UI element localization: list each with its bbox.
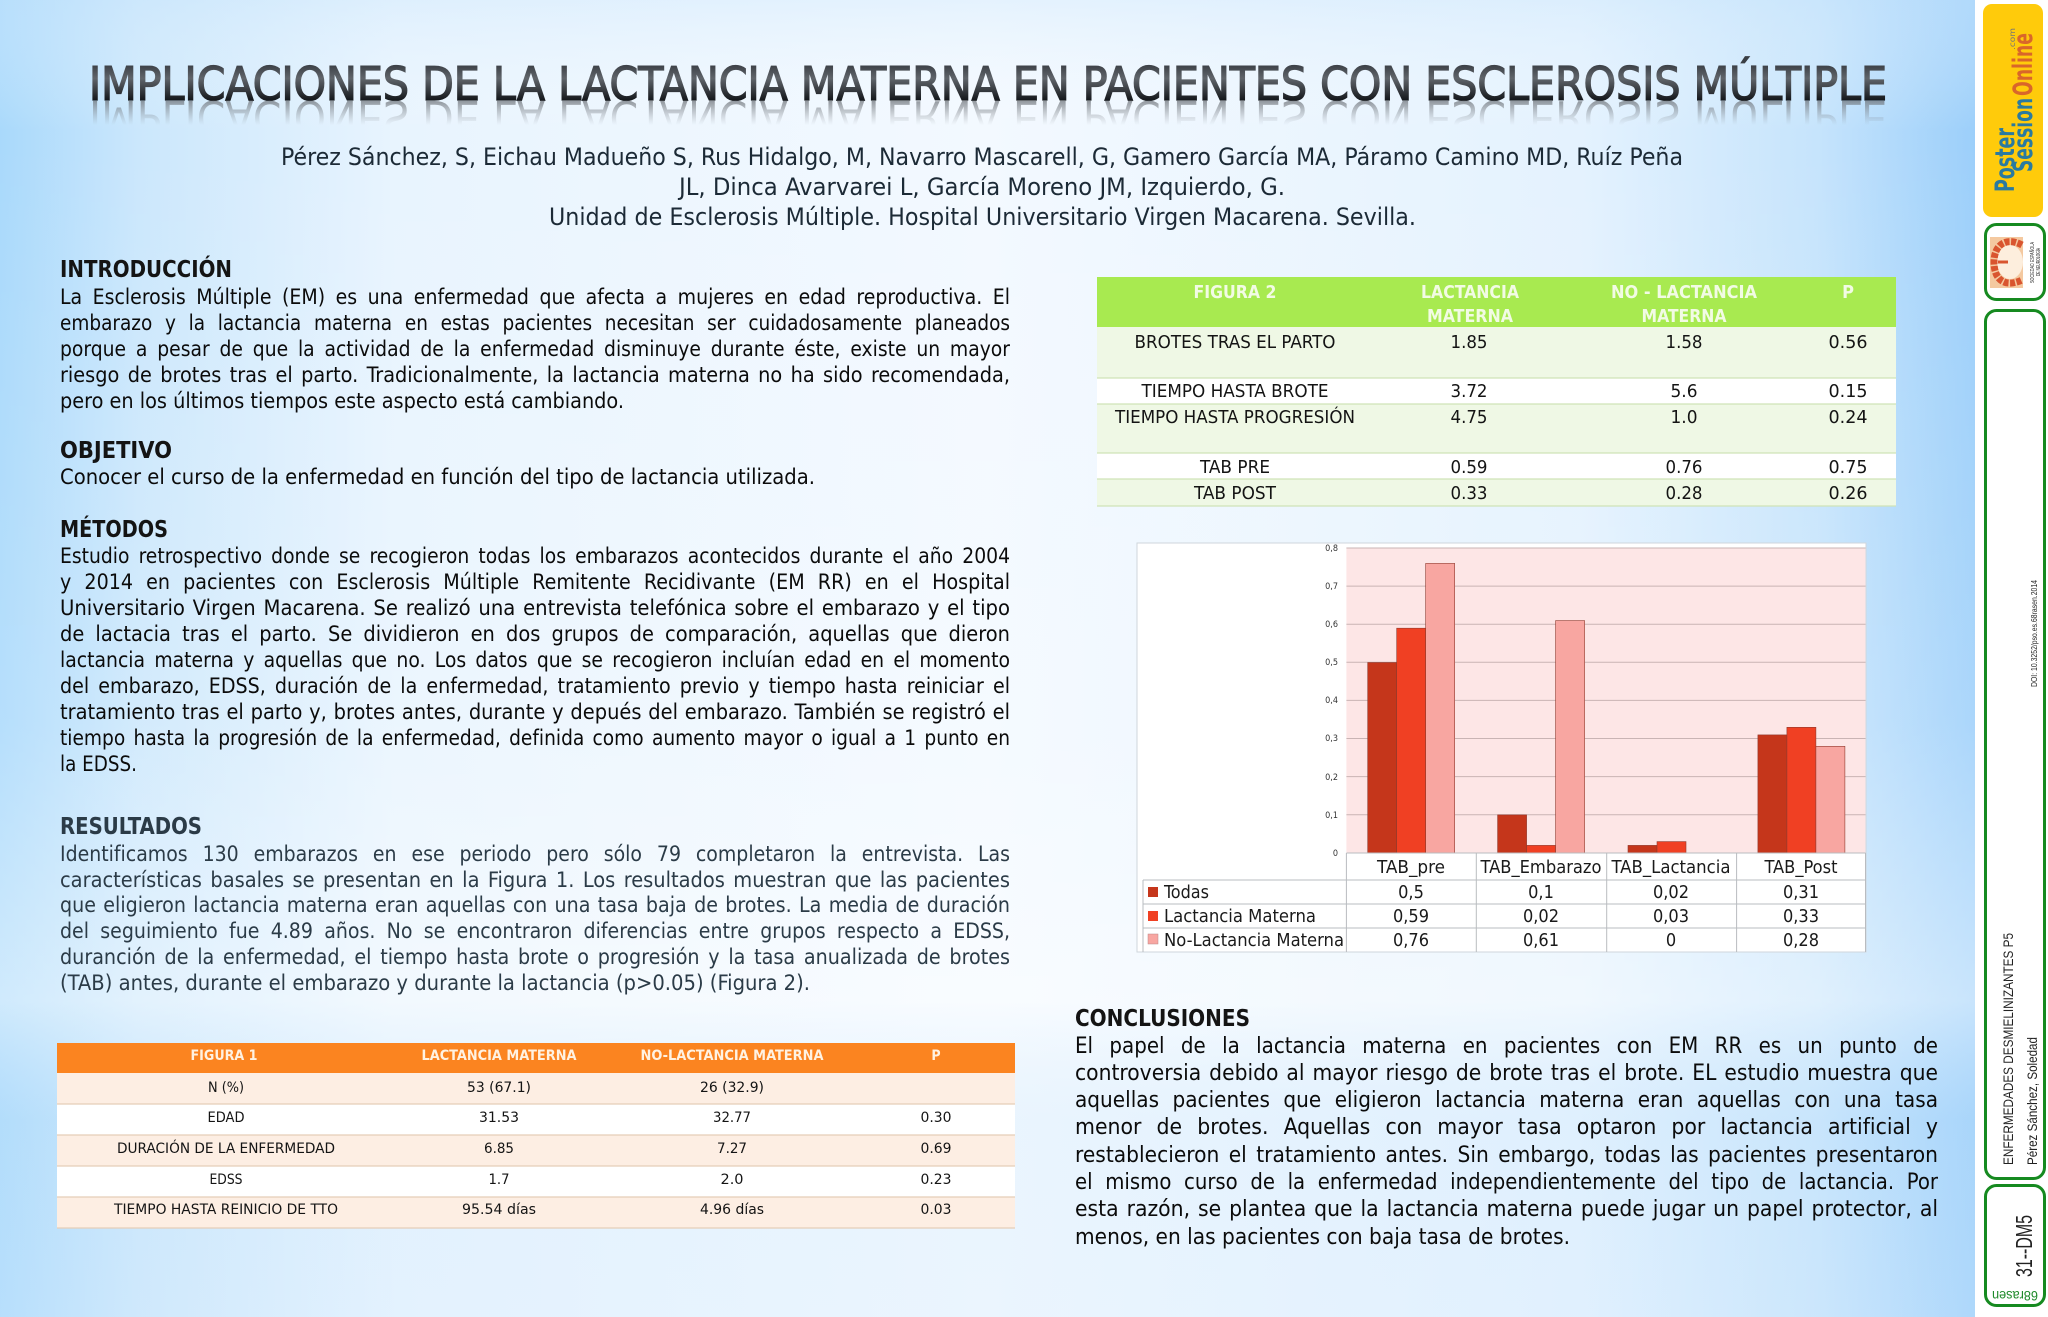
chart axis labels: 0,6 bbox=[1325, 620, 1338, 630]
table: figura 2: 5.6 bbox=[1670, 381, 1698, 402]
chart data table: 0 bbox=[1666, 930, 1676, 951]
table: figura 1: NO-LACTANCIA MATERNA bbox=[640, 1048, 824, 1064]
table: figura 2: 4.75 bbox=[1450, 407, 1488, 428]
chart data table: No-Lactancia Materna bbox=[1164, 930, 1344, 951]
chart data table: 0,03 bbox=[1653, 906, 1689, 927]
table: figura 1: 26 (32.9) bbox=[700, 1080, 764, 1096]
authors and affiliation bbox=[281, 143, 1683, 231]
heading: conclusiones: CONCLUSIONES bbox=[1075, 1006, 1250, 1032]
logo: sociedad de neurología bbox=[1986, 224, 2044, 300]
table: figura 1: TIEMPO HASTA REINICIO DE TTO bbox=[113, 1202, 338, 1218]
chart data table: TAB_pre bbox=[1376, 857, 1445, 878]
chart data table: Todas bbox=[1163, 882, 1209, 903]
table: figura 2: FIGURA 2 bbox=[1194, 282, 1276, 303]
logo: sociedad de neurología: SOCIEDAD ESPAÑOLA bbox=[2029, 241, 2036, 283]
chart axis labels: 0,2 bbox=[1325, 773, 1338, 783]
logo: Poster Session Online: Poster bbox=[1990, 128, 2021, 192]
chart data table: 0,33 bbox=[1783, 906, 1819, 927]
table: figura 2: MATERNA bbox=[1642, 306, 1727, 327]
table: figura 2: 1.58 bbox=[1666, 332, 1702, 353]
table: figura 2: 3.72 bbox=[1450, 381, 1488, 402]
table: figura 2: 1.85 bbox=[1450, 332, 1488, 353]
table: figura 2: MATERNA bbox=[1427, 306, 1513, 327]
table: figura 1: 2.0 bbox=[720, 1172, 744, 1188]
heading: métodos: MÉTODOS bbox=[60, 515, 168, 543]
poster code box: 31--DM5 bbox=[2011, 1215, 2037, 1277]
table: figura 1: 1.7 bbox=[488, 1172, 510, 1188]
table: figura 1: 53 (67.1) bbox=[467, 1080, 531, 1096]
table: figura 1: EDAD bbox=[208, 1110, 244, 1126]
table: figura 2 bbox=[1097, 277, 1896, 506]
text block: métodos: tiempo hasta la progresión de la enfermedad, definida como aumento mayor o igual a 1 punto en bbox=[60, 726, 1010, 750]
table: figura 1: P bbox=[931, 1048, 941, 1064]
logo: Poster Session Online bbox=[1983, 4, 2043, 217]
chart data table: 0,02 bbox=[1523, 906, 1559, 927]
table: figura 1: 4.96 días bbox=[700, 1202, 764, 1218]
table: figura 2: LACTANCIA bbox=[1421, 282, 1519, 303]
heading: resultados: RESULTADOS bbox=[60, 814, 202, 840]
session info box bbox=[1986, 310, 2044, 1178]
table: figura 2: 0.59 bbox=[1450, 457, 1488, 478]
table: figura 2: TIEMPO HASTA BROTE bbox=[1140, 381, 1328, 402]
text block: introducción bbox=[60, 285, 1010, 413]
table: figura 1: 6.85 bbox=[484, 1141, 514, 1157]
chart axis labels: 0,5 bbox=[1325, 658, 1338, 668]
text block: resultados: del seguimiento fue 4.89 años. No se encontraron diferencias entre grupos respecto a EDSS, bbox=[60, 919, 1010, 943]
authors and affiliation: Unidad de Esclerosis Múltiple. Hospital Universitario Virgen Macarena. Sevilla. bbox=[549, 203, 1416, 231]
text block: métodos bbox=[60, 544, 1010, 776]
chart data table: TAB_Post bbox=[1763, 857, 1838, 878]
text block: resultados: Identificamos 130 embarazos en ese periodo pero sólo 79 completaron la entrevista. Las bbox=[60, 842, 1010, 866]
chart axis labels bbox=[1325, 544, 1338, 859]
session info box: ENFERMEDADES DESMIELINIZANTES P5 bbox=[2000, 933, 2016, 1165]
text block: conclusiones: el mismo curso de la enfermedad independientemente del tipo de lactancia. Por bbox=[1075, 1170, 1939, 1195]
text block: introducción: porque a pesar de que la actividad de la enfermedad disminuye durante éste, existe un mayor bbox=[60, 337, 1010, 361]
text block: introducción: pero en los últimos tiempos este aspecto está cambiando. bbox=[60, 389, 624, 413]
session info box: DOI: 10.3252/pso.es.68rasen.2014 bbox=[2030, 580, 2039, 687]
text block: resultados: (TAB) antes, durante el embarazo y durante la lactancia (p>0.05) (Figura 2). bbox=[60, 971, 810, 995]
chart axis labels: 0,8 bbox=[1325, 544, 1338, 554]
text block: conclusiones: menos, en las pacientes con baja tasa de brotes. bbox=[1075, 1225, 1570, 1250]
table: figura 2: NO - LACTANCIA bbox=[1611, 282, 1757, 303]
sidebar bbox=[1975, 0, 2048, 1317]
chart data table: 0,59 bbox=[1393, 906, 1429, 927]
chart data table: 0,31 bbox=[1783, 882, 1819, 903]
panel: conclusiones bbox=[1075, 1006, 1939, 1250]
table: figura 2: 0.28 bbox=[1666, 483, 1702, 504]
chart data table: 0,28 bbox=[1783, 930, 1819, 951]
table: figura 2: 0.75 bbox=[1828, 457, 1868, 478]
chart axis labels: 0,7 bbox=[1325, 582, 1338, 592]
chart data table: 0,02 bbox=[1653, 882, 1689, 903]
table: figura 2: 0.26 bbox=[1828, 483, 1868, 504]
table: figura 1: 7.27 bbox=[717, 1141, 747, 1157]
table: figura 1: 0.69 bbox=[920, 1141, 952, 1157]
table: figura 2: 0.76 bbox=[1666, 457, 1702, 478]
chart data table: TAB_Lactancia bbox=[1610, 857, 1730, 878]
table: figura 1: EDSS bbox=[210, 1172, 242, 1188]
text block: conclusiones: esta razón, se plantea que la lactancia materna puede jugar un papel protector, al bbox=[1075, 1197, 1938, 1222]
heading: objetivo: OBJETIVO bbox=[60, 438, 172, 464]
heading: introducción: INTRODUCCIÓN bbox=[60, 255, 232, 283]
poster code box bbox=[1986, 1186, 2044, 1306]
chart bars bbox=[1368, 563, 1845, 853]
session info box: Pérez Sánchez, Soledad bbox=[2024, 1037, 2040, 1165]
chart data table: Lactancia Materna bbox=[1164, 906, 1316, 927]
text block: conclusiones bbox=[1075, 1034, 1939, 1250]
text block: métodos: y 2014 en pacientes con Esclerosis Múltiple Remitente Recidivante (EM RR) en el Hospital bbox=[60, 570, 1010, 594]
table: figura 2: BROTES TRAS EL PARTO bbox=[1134, 332, 1336, 353]
table: figura 1: 0.30 bbox=[920, 1110, 952, 1126]
title: IMPLICACIONES DE LA LACTANCIA MATERNA EN PACIENTES CON ESCLEROSIS MÚLTIPLE bbox=[89, 90, 1887, 144]
logo: Poster Session Online: .com bbox=[2008, 28, 2017, 50]
table: figura 1: 32.77 bbox=[713, 1110, 751, 1126]
table: figura 2: 0.24 bbox=[1828, 407, 1868, 428]
text block: resultados: duranción de la enfermedad, el tiempo hasta brote o progresión y la tasa anualizada de brotes bbox=[60, 945, 1010, 969]
text block: conclusiones: restablecieron el tratamiento antes. Sin embargo, todas las pacientes presentaron bbox=[1075, 1143, 1938, 1168]
poster code box: 68rasen bbox=[1992, 1288, 2038, 1304]
table: figura 2: TAB PRE bbox=[1199, 457, 1270, 478]
table: figura 2: 1.0 bbox=[1670, 407, 1698, 428]
text block: métodos: la EDSS. bbox=[60, 752, 137, 776]
title: IMPLICACIONES DE LA LACTANCIA MATERNA EN PACIENTES CON ESCLEROSIS MÚLTIPLE bbox=[89, 57, 1887, 111]
chart axis labels: 0,4 bbox=[1325, 696, 1338, 706]
text block: métodos: del embarazo, EDSS, duración de la enfermedad, tratamiento previo y tiempo hasta reiniciar el bbox=[60, 674, 1010, 698]
table: figura 2: P bbox=[1842, 282, 1854, 303]
text block: objetivo: Conocer el curso de la enfermedad en función del tipo de lactancia utilizada. bbox=[60, 465, 815, 489]
table: figura 1: N (%) bbox=[208, 1080, 244, 1096]
text block: introducción: riesgo de brotes tras el parto. Tradicionalmente, la lactancia materna no ha sido recomendada, bbox=[60, 363, 1010, 387]
table: figura 1: DURACIÓN DE LA ENFERMEDAD bbox=[117, 1139, 335, 1157]
text block: conclusiones: aquellas pacientes que eligieron lactancia materna eran aquellas con una tasa bbox=[1075, 1088, 1938, 1113]
table: figura 1 bbox=[57, 1043, 1015, 1228]
chart axis labels: 0 bbox=[1333, 849, 1338, 859]
text block: introducción: La Esclerosis Múltiple (EM) es una enfermedad que afecta a mujeres en edad reproductiva. El bbox=[60, 285, 1010, 309]
panel: introducción bbox=[60, 255, 1010, 413]
text block: resultados: que eligieron lactancia materna eran aquellas con una tasa baja de brotes. La media de duración bbox=[60, 893, 1010, 917]
text block: métodos: de lactacia tras el parto. Se dividieron en dos grupos de comparación, aquellas que dieron bbox=[60, 622, 1010, 646]
logo: Poster Session Online: Online bbox=[2008, 33, 2039, 96]
table: figura 1: 31.53 bbox=[479, 1110, 519, 1126]
panel: objetivo bbox=[60, 438, 815, 489]
text block: conclusiones: controversia debido al mayor riesgo de brote tras el brote. EL estudio muestra que bbox=[1075, 1061, 1938, 1086]
text block: métodos: tratamiento tras el parto y, brotes antes, durante y depués del embarazo. También se registró el bbox=[60, 700, 1010, 724]
logo: sociedad de neurología: DE NEUROLOGÍA bbox=[2035, 248, 2042, 276]
table: figura 2: TIEMPO HASTA PROGRESIÓN bbox=[1114, 406, 1355, 428]
authors and affiliation: Pérez Sánchez, S, Eichau Madueño S, Rus Hidalgo, M, Navarro Mascarell, G, Gamero García MA, Páramo Camino MD, Ruíz Peña bbox=[281, 143, 1683, 171]
table: figura 1: LACTANCIA MATERNA bbox=[422, 1048, 577, 1064]
authors and affiliation: JL, Dinca Avarvarei L, García Moreno JM, Izquierdo, G. bbox=[677, 173, 1285, 201]
table: figura 1: 0.03 bbox=[920, 1202, 952, 1218]
panel: resultados bbox=[60, 814, 1010, 995]
table: figura 1: FIGURA 1 bbox=[190, 1048, 258, 1064]
chart data table: TAB_Embarazo bbox=[1479, 857, 1602, 878]
title bbox=[89, 57, 1887, 144]
panel: métodos bbox=[60, 515, 1010, 776]
text block: métodos: lactancia materna y aquellas que no. Los datos que se recogieron incluían edad en el momento bbox=[60, 648, 1010, 672]
chart data table: 0,61 bbox=[1523, 930, 1559, 951]
table: figura 2: 0.33 bbox=[1450, 483, 1488, 504]
table: figura 2: TAB POST bbox=[1193, 483, 1276, 504]
text block: conclusiones: El papel de la lactancia materna en pacientes con EM RR es un punto de bbox=[1075, 1034, 1938, 1059]
table: figura 2: 0.15 bbox=[1828, 381, 1868, 402]
table: figura 1: 0.23 bbox=[920, 1172, 952, 1188]
table: figura 2: 0.56 bbox=[1828, 332, 1868, 353]
chart axis labels: 0,1 bbox=[1325, 811, 1338, 821]
bar chart: TAB bbox=[1137, 543, 1866, 952]
text block: métodos: Estudio retrospectivo donde se recogieron todas los embarazos acontecidos durante el año 2004 bbox=[60, 544, 1010, 568]
text block: resultados: características basales se presentan en la Figura 1. Los resultados muestran que las pacientes bbox=[60, 868, 1010, 892]
chart data table: 0,1 bbox=[1528, 882, 1554, 903]
table: figura 1: 95.54 días bbox=[462, 1202, 536, 1218]
chart data table: 0,76 bbox=[1393, 930, 1429, 951]
text block: métodos: Universitario Virgen Macarena. Se realizó una entrevista telefónica sobre el embarazo y el tipo bbox=[60, 596, 1010, 620]
chart data table: 0,5 bbox=[1398, 882, 1424, 903]
logo: Poster Session Online: Session bbox=[2008, 98, 2039, 172]
text block: conclusiones: menor de brotes. Aquellas con mayor tasa optaron por lactancia artificial y bbox=[1075, 1115, 1938, 1140]
chart axis labels: 0,3 bbox=[1325, 734, 1338, 744]
text block: introducción: embarazo y la lactancia materna en estas pacientes necesitan ser cuidadosamente planeados bbox=[60, 311, 1010, 335]
chart data table bbox=[1143, 853, 1866, 952]
text block: resultados bbox=[60, 842, 1010, 995]
